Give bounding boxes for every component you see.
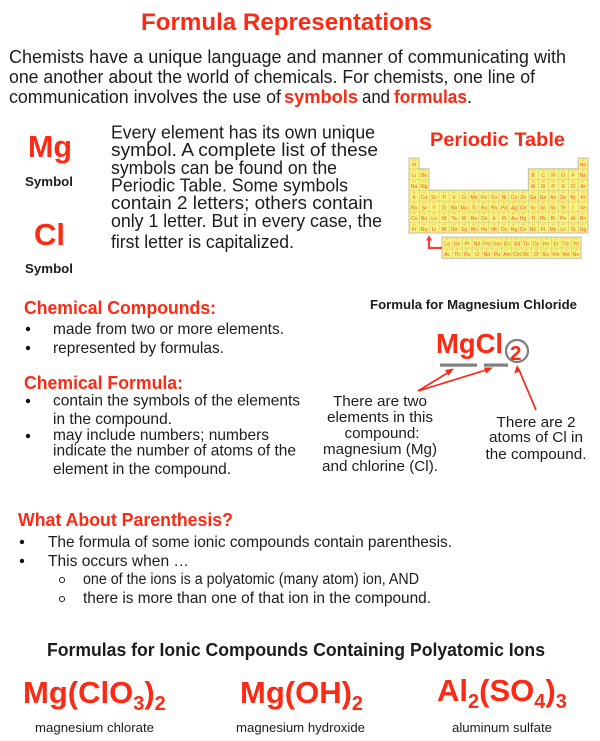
symbol: Cl: Cl (34, 217, 65, 252)
arrow: lanthanides to table (426, 235, 442, 248)
compounds list: represented by formulas. (53, 340, 224, 357)
formula: magnesium hydroxide: Mg(OH) (240, 675, 352, 710)
periodic table chart: Ac (444, 252, 450, 258)
periodic table chart: Tm (562, 242, 570, 248)
periodic table chart: Ts (570, 227, 576, 233)
periodic table chart: Nd (474, 242, 480, 248)
periodic table chart: Cs (411, 216, 418, 222)
periodic table chart: Xe (580, 206, 586, 212)
periodic table chart: Zr (442, 206, 447, 212)
title: Formula Representations (141, 9, 432, 36)
periodic table chart: Pd (501, 206, 507, 212)
formula: magnesium hydroxide: 2 (352, 693, 363, 715)
periodic table chart: Ge (540, 195, 547, 201)
symbol: Cl: Symbol (25, 261, 73, 276)
periodic table chart (409, 158, 588, 258)
symbol: Mg: Mg (28, 129, 72, 164)
element symbols paragraph: Every element has its own unique (111, 122, 375, 142)
intro text: Chemists have a unique language and manner of communicating with (9, 47, 566, 67)
periodic table chart: Cd (520, 206, 526, 212)
periodic table chart: Be (421, 173, 427, 179)
periodic table chart: Og (580, 227, 587, 233)
periodic table chart: Ga (530, 195, 537, 201)
periodic table chart: Rf (442, 227, 447, 233)
periodic table chart: I (572, 206, 574, 212)
periodic table chart: Te (560, 206, 566, 212)
periodic table chart: Mn (471, 195, 478, 201)
periodic table chart: Rb (411, 206, 417, 212)
periodic table chart: Ra (421, 227, 427, 233)
periodic table chart: Kr (580, 195, 586, 201)
periodic table chart: Os (481, 216, 488, 222)
intro text: communication involves the use of (9, 87, 282, 107)
periodic table chart: Db (451, 227, 457, 233)
callout: two elements: magnesium (Mg) (323, 441, 437, 458)
heading: Chemical Compounds: Chemical Compounds: (24, 298, 216, 318)
periodic table chart: Sg (461, 227, 467, 233)
periodic table chart: Se (560, 195, 566, 201)
periodic table chart: V (452, 195, 456, 201)
periodic table chart: U (475, 252, 479, 258)
periodic table chart: Ce (454, 242, 460, 248)
parenthesis list: there is more than one of that ion in the compound. (83, 590, 431, 607)
periodic table chart: Ne (580, 173, 586, 179)
periodic table chart: Sc (431, 195, 437, 201)
periodic table chart: Ir (492, 216, 496, 222)
periodic table chart: Cr (461, 195, 467, 201)
formula: magnesium hydroxide: magnesium hydroxide (236, 720, 365, 735)
compounds list: made from two or more elements. (53, 321, 284, 338)
periodic table chart: Pt (502, 216, 507, 222)
periodic table chart: Ds (501, 227, 508, 233)
periodic table chart: Po (560, 216, 566, 222)
periodic table chart: Bi (551, 216, 555, 222)
periodic table chart: Cl (571, 184, 575, 190)
element symbols paragraph: symbols can be found on the (111, 158, 337, 178)
intro text: . (467, 87, 472, 107)
callout: two atoms (486, 414, 586, 463)
callout: two atoms: atoms of Cl in (489, 429, 583, 446)
periodic table chart: Cf (534, 252, 539, 258)
periodic table chart: K (412, 195, 416, 201)
formula: magnesium chlorate (23, 675, 166, 735)
callout: two elements: and chlorine (Cl). (322, 458, 438, 475)
periodic table chart: Mo (461, 206, 468, 212)
periodic table chart: Ni (502, 195, 506, 201)
periodic table chart: Mt (491, 227, 497, 233)
callout: two atoms: the compound. (486, 446, 586, 463)
periodic table chart: Pm (483, 242, 491, 248)
periodic table chart: Dy (533, 242, 540, 248)
periodic table chart: Th (454, 252, 460, 258)
periodic table chart: Na (411, 184, 417, 190)
element symbols paragraph: Periodic Table. Some symbols (111, 176, 348, 196)
formula list: may include numbers; numbers (53, 427, 269, 444)
periodic table chart: In (531, 206, 535, 212)
periodic table chart: Er (554, 242, 559, 248)
formula list: contain the symbols of the elements (53, 392, 300, 410)
periodic table chart: S (561, 184, 565, 190)
intro text: formulas (394, 87, 467, 107)
periodic table chart: Am (503, 252, 511, 258)
periodic table chart: Nb (451, 206, 457, 212)
periodic table chart: Co (491, 195, 497, 201)
callout: two elements: elements in this (327, 409, 433, 426)
parenthesis list: This occurs when … (48, 553, 189, 570)
periodic table chart: Sr (422, 206, 427, 212)
periodic table chart: Ar (580, 184, 586, 190)
periodic table chart: Li (412, 173, 416, 179)
formula list (26, 392, 300, 478)
periodic table chart: Hs (481, 227, 488, 233)
periodic table chart: Al (531, 184, 535, 190)
periodic table chart: Md (563, 252, 570, 258)
element symbols paragraph: contain 2 letters; others contain (111, 193, 373, 213)
periodic table chart: He (580, 162, 586, 168)
callout: two elements: compound: (344, 425, 420, 442)
periodic table chart: Au (511, 216, 517, 222)
periodic table chart: Tl (531, 216, 535, 222)
parenthesis list: one of the ions is a polyatomic (many atom) ion, AND (83, 571, 419, 588)
periodic table chart: W (462, 216, 467, 222)
periodic table chart: Pu (494, 252, 500, 258)
periodic table chart: Tb (523, 242, 529, 248)
periodic table chart: Fl (541, 227, 545, 233)
formula: aluminum sulfate: 4 (534, 691, 546, 713)
symbol: Cl (25, 217, 73, 276)
periodic table chart: Fm (552, 252, 560, 258)
element symbols paragraph: symbol. A complete list of these (111, 140, 378, 160)
arrows to element symbols (418, 368, 493, 391)
periodic table chart: Lr (432, 227, 437, 233)
periodic table chart: Es (543, 252, 549, 258)
formula list: indicate the number of atoms of the (53, 442, 296, 460)
periodic table chart: Pb (540, 216, 546, 222)
parenthesis list: The formula of some ionic compounds contain parenthesis. (48, 534, 452, 551)
periodic table chart: Sm (493, 242, 501, 248)
callout: two elements: There are two (333, 393, 427, 410)
periodic table chart: B (531, 173, 535, 179)
intro text: one another about the world of chemicals. For chemists, one line of (9, 67, 536, 87)
callout: two atoms: There are 2 (496, 414, 576, 431)
arrow to subscript (514, 365, 536, 410)
periodic table chart: Cm (513, 252, 521, 258)
parenthesis list (20, 534, 452, 607)
periodic table chart: Yb (573, 242, 579, 248)
periodic table chart: O (561, 173, 565, 179)
periodic table chart: Fe (481, 195, 487, 201)
formula: magnesium chlorate: 2 (155, 693, 166, 715)
periodic table chart: La (444, 242, 450, 248)
formula diagram: MgCl2: MgCl (436, 328, 503, 359)
heading: Formulas for Ionic Compounds: Formulas for Ionic Compounds Containing Polyatomic Ions (47, 640, 545, 660)
periodic table chart: Np (484, 252, 490, 258)
periodic table chart: C (541, 173, 545, 179)
formula list: in the compound. (53, 411, 172, 428)
periodic table chart: Zn (520, 195, 526, 201)
periodic table chart: Ti (442, 195, 446, 201)
heading: What About Parenthesis: What About Parenthesis? (18, 510, 233, 530)
intro text: symbols (284, 87, 358, 107)
periodic table chart: Y (432, 206, 436, 212)
symbol: Mg: Symbol (25, 174, 73, 189)
formula: aluminum sulfate: aluminum sulfate (452, 720, 552, 735)
element symbols paragraph: only 1 letter. But in every case, the (111, 211, 382, 231)
heading: Periodic Table: Periodic Table (430, 129, 565, 151)
periodic table chart: As (550, 195, 556, 201)
formula: magnesium hydroxide (236, 675, 365, 735)
periodic table chart: Tc (472, 206, 477, 212)
periodic table chart: Ta (451, 216, 457, 222)
formula: aluminum sulfate: 3 (556, 691, 567, 713)
periodic table chart: Bk (523, 252, 529, 258)
heading: Chemical Formula: Chemical Formula: (24, 373, 183, 393)
periodic table chart: Re (471, 216, 477, 222)
formula list: element in the compound. (53, 461, 231, 478)
periodic table chart: Rg (511, 227, 517, 233)
periodic table chart: Hf (442, 216, 447, 222)
periodic table chart: H (412, 162, 416, 168)
symbol: Mg (25, 129, 73, 189)
periodic table chart: Ho (543, 242, 549, 248)
periodic table chart: Lu (431, 216, 437, 222)
periodic table chart: Mg (421, 184, 428, 190)
periodic table chart: Rh (491, 206, 497, 212)
element symbols paragraph (111, 122, 382, 252)
periodic table chart: F (571, 173, 575, 179)
formula: magnesium chlorate: ) (144, 675, 155, 710)
compounds list (26, 321, 284, 357)
periodic table chart: Pr (464, 242, 470, 248)
periodic table chart: Rn (580, 216, 586, 222)
periodic table chart: Cu (511, 195, 517, 201)
periodic table chart: Br (570, 195, 576, 201)
formula diagram: MgCl2: 2 (510, 343, 522, 365)
intro text: and (362, 87, 390, 107)
periodic table chart: Ca (421, 195, 427, 201)
periodic table chart: Mc (550, 227, 557, 233)
periodic table chart: Bh (471, 227, 477, 233)
periodic table chart: Si (541, 184, 545, 190)
periodic table chart: Lv (560, 227, 566, 233)
callout: two elements (322, 393, 438, 475)
formula: magnesium chlorate: magnesium chlorate (35, 720, 154, 735)
periodic table chart: Sb (550, 206, 556, 212)
periodic table chart: Eu (504, 242, 510, 248)
formula: aluminum sulfate: 2 (468, 691, 479, 713)
formula: aluminum sulfate (437, 673, 567, 735)
element symbols paragraph: first letter is capitalized. (111, 232, 294, 252)
heading: Formula for Magnesium Chloride: Formula for Magnesium Chloride (370, 297, 577, 312)
formula: aluminum sulfate: Al (437, 673, 468, 708)
periodic table chart: Hg (520, 216, 526, 222)
periodic table chart: Nh (530, 227, 536, 233)
periodic table chart: Gd (514, 242, 521, 248)
periodic table chart: At (571, 216, 576, 222)
formula: magnesium chlorate: 3 (133, 693, 144, 715)
periodic table chart: N (551, 173, 555, 179)
periodic table chart: Pa (464, 252, 470, 258)
periodic table chart: P (551, 184, 555, 190)
formula: aluminum sulfate: ) (545, 673, 556, 708)
formula: magnesium chlorate: Mg(ClO (23, 675, 133, 710)
formula diagram: MgCl2 (436, 328, 528, 367)
periodic table chart: Ag (511, 206, 517, 212)
periodic table chart: Sn (540, 206, 546, 212)
periodic table chart: No (573, 252, 579, 258)
formula: aluminum sulfate: (SO (479, 673, 534, 708)
intro text (9, 47, 566, 107)
periodic table chart: Cn (520, 227, 526, 233)
periodic table chart: Ba (421, 216, 427, 222)
periodic table chart: Fr (412, 227, 417, 233)
periodic table chart: Ru (481, 206, 487, 212)
